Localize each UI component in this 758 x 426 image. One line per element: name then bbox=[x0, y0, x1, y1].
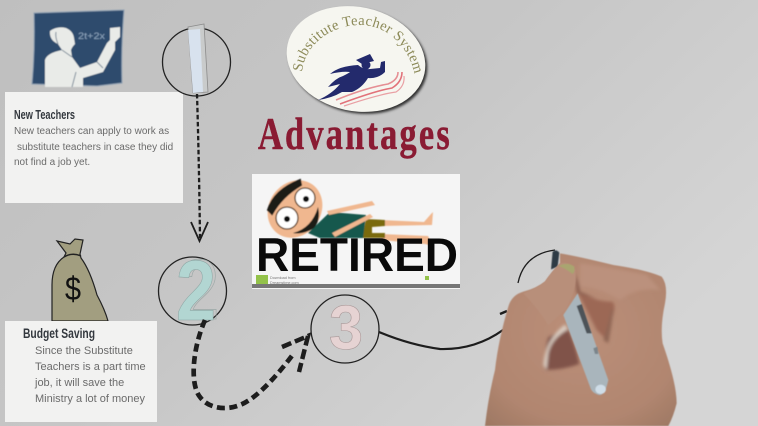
text: budget saving description: job, it will save the bbox=[34, 377, 124, 389]
step 3 circle with numeral bbox=[311, 294, 379, 363]
thumb bbox=[523, 263, 576, 325]
text: new teachers description: substitute teachers in case they did bbox=[17, 142, 173, 153]
text: new teachers description bbox=[14, 126, 173, 168]
watermark strip: Download from bbox=[270, 276, 296, 280]
text: budget saving description: Ministry a lot of money bbox=[35, 393, 146, 405]
logo: substitute teacher system bbox=[286, 6, 430, 116]
panel: new teachers bbox=[5, 92, 183, 203]
title: advantages: Advantages bbox=[258, 108, 452, 159]
step 2 circle with numeral: 2 bbox=[176, 244, 216, 339]
text: budget saving description bbox=[34, 345, 146, 405]
retired word: RETIRED bbox=[256, 228, 458, 281]
text: budget saving description: Since the Substitute bbox=[35, 345, 133, 357]
illustration: retired cartoon bbox=[252, 170, 460, 289]
hand base bbox=[485, 253, 677, 426]
arrow: dashed curve from step 2 to step 3 bbox=[194, 320, 308, 408]
text: new teachers description: not find a job yet. bbox=[14, 157, 90, 168]
line from step 3 to step 4 bbox=[379, 330, 503, 349]
illustration: teacher at chalkboard bbox=[32, 10, 124, 87]
arrow: dashed from step 1 to step 2 bbox=[191, 94, 208, 241]
illustration: money bag bbox=[52, 239, 108, 321]
heading: new teachers: New Teachers bbox=[14, 107, 75, 122]
marker tip bbox=[551, 250, 559, 269]
hand shading bbox=[543, 263, 660, 370]
retired man figure bbox=[256, 170, 433, 248]
illustration: teacher at chalkboard: 2t+2x bbox=[78, 31, 106, 41]
illustration: money bag: $ bbox=[65, 270, 81, 307]
panel: budget saving bbox=[5, 321, 157, 422]
watermark strip bbox=[256, 275, 429, 285]
text: budget saving description: Teachers is a part time bbox=[35, 361, 146, 373]
partially drawn step 4 circle bbox=[500, 250, 555, 314]
text: new teachers description: New teachers can apply to work as bbox=[14, 126, 169, 137]
logo icon: running graduate bbox=[318, 54, 404, 106]
heading: budget saving: Budget Saving bbox=[23, 325, 95, 341]
watermark strip: Dreamstime.com bbox=[270, 281, 299, 285]
illustration: hand holding marker bbox=[485, 250, 677, 426]
logo curved text: Substitute Teacher System bbox=[293, 16, 421, 74]
marker body bbox=[563, 293, 608, 395]
step 2 circle with numeral bbox=[158, 243, 226, 339]
step 2 circle with numeral: 2 bbox=[179, 243, 219, 338]
step 1 circle with ruler numeral bbox=[162, 24, 230, 96]
step 3 circle with numeral: 3 bbox=[329, 294, 363, 363]
